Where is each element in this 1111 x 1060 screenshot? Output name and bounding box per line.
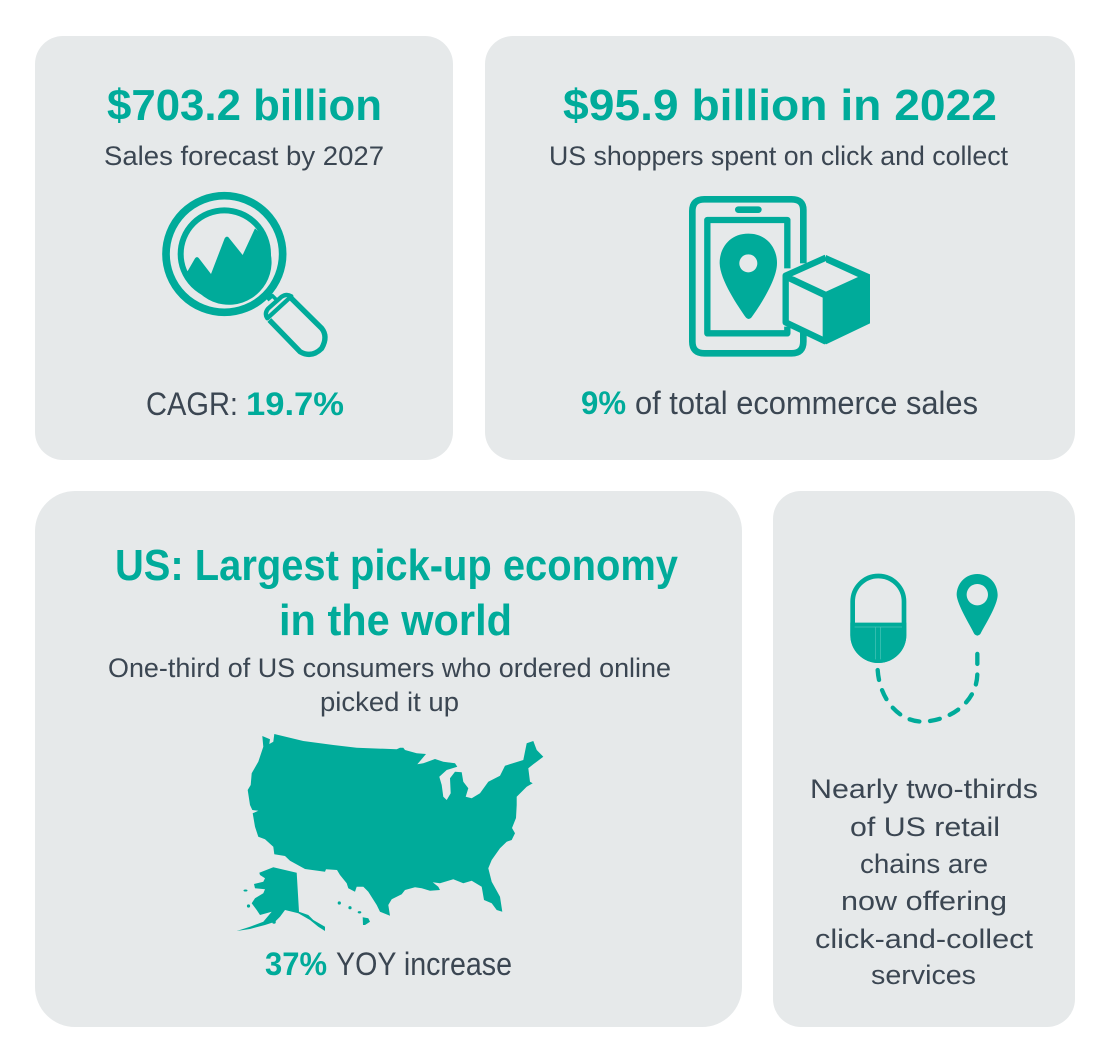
panel: click and collect spend — [485, 36, 1075, 460]
stat: 37% YOY increase — [265, 946, 512, 982]
text: nearly two-thirds of US retail chains: click-and-collect — [815, 924, 1034, 954]
panel: sales forecast — [35, 36, 453, 460]
text: one-third of consumers: One-third of US consumers who ordered online — [108, 653, 671, 683]
panel: retail chains offering click and collect — [773, 491, 1075, 1027]
text: nearly two-thirds of US retail chains: services — [871, 960, 976, 990]
icon: magnifying glass with chart — [166, 196, 325, 354]
stat: CAGR 19.7%: 19.7% — [246, 386, 344, 422]
text: nearly two-thirds of US retail chains: chains are — [860, 849, 988, 879]
panel: US pick-up economy — [35, 491, 742, 1027]
text: nearly two-thirds of US retail chains: Nearly two-thirds — [810, 774, 1038, 804]
stat: 37% YOY increase: YOY increase — [336, 946, 512, 982]
heading: US largest pick-up economy in the world: in the world — [279, 596, 512, 645]
heading: $95.9 billion in 2022: $95.9 billion in 2022 — [563, 81, 997, 130]
map: United States — [237, 734, 543, 931]
icon: phone with pin and parcel — [692, 199, 870, 353]
text: nearly two-thirds of US retail chains: now offering — [841, 886, 1007, 916]
heading: $703.2 billion: $703.2 billion — [107, 81, 382, 130]
stat: 9% of total ecommerce sales: of total ecommerce sales — [635, 385, 978, 421]
text: one-third of consumers: picked it up — [320, 687, 459, 717]
text: US shoppers spent on click and collect: US shoppers spent on click and collect — [549, 141, 1008, 171]
stat: 9% of total ecommerce sales: 9% — [581, 385, 626, 421]
stat: CAGR 19.7% — [146, 386, 344, 422]
text: one-third of consumers — [108, 653, 671, 717]
text: nearly two-thirds of US retail chains — [810, 774, 1038, 990]
icon: mouse, dashed route and location pin — [850, 574, 998, 722]
stat: 37% YOY increase: 37% — [265, 946, 327, 982]
heading: US largest pick-up economy in the world — [115, 541, 678, 645]
text: nearly two-thirds of US retail chains: of US retail — [850, 812, 1000, 842]
stat: CAGR 19.7%: CAGR: — [146, 386, 238, 422]
text: sales forecast by 2027: Sales forecast by 2027 — [104, 141, 384, 171]
heading: US largest pick-up economy in the world: US: Largest pick-up economy — [115, 541, 678, 590]
